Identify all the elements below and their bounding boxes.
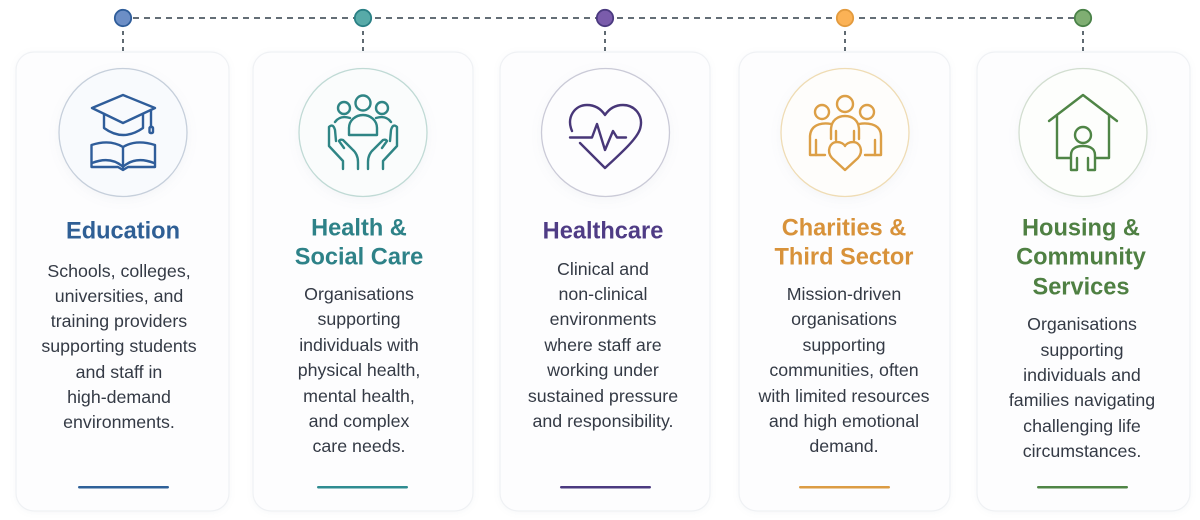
heading: Third Sector [775, 244, 913, 270]
description: environments [550, 309, 656, 329]
card background [253, 52, 473, 511]
description: supporting [802, 335, 886, 355]
description: and staff in [76, 362, 162, 382]
description: individuals and [1023, 365, 1141, 385]
icon circle [59, 68, 187, 196]
description: care needs. [313, 436, 405, 456]
description: non-clinical [559, 284, 647, 304]
description: communities, often [769, 360, 919, 380]
description: Mission-driven [787, 284, 901, 304]
description: Organisations [1027, 314, 1137, 334]
accent bar [799, 486, 890, 488]
icon circle [542, 68, 670, 196]
description: Clinical and [557, 259, 649, 279]
heading: Health & [311, 216, 407, 242]
panel: healthcare [500, 52, 710, 511]
description: organisations [791, 309, 897, 329]
icon circle [1019, 68, 1147, 196]
timeline node: healthcare [597, 10, 613, 26]
description: supporting [317, 309, 401, 329]
description: working under [546, 360, 659, 380]
description: circumstances. [1023, 441, 1141, 461]
description: and complex [309, 411, 410, 431]
card background [16, 52, 229, 511]
heading: Healthcare [543, 218, 663, 244]
timeline node: education [115, 10, 131, 26]
panel: housing and community services [977, 52, 1190, 511]
description: universities, and [55, 286, 183, 306]
timeline node: health and social care [355, 10, 371, 26]
description: supporting [1040, 340, 1124, 360]
accent bar [1037, 486, 1128, 488]
description: environments. [63, 412, 175, 432]
description: and high emotional [769, 411, 919, 431]
heading: Housing & [1022, 216, 1140, 242]
card background [739, 52, 950, 511]
heading: Education [66, 218, 180, 244]
panel: education [16, 52, 229, 511]
icon: people in caring hands [329, 96, 397, 169]
card background [500, 52, 710, 511]
description: demand. [809, 436, 879, 456]
description: supporting students [41, 336, 197, 356]
description: physical health, [298, 360, 420, 380]
icon: family with heart [810, 96, 881, 170]
description: families navigating [1009, 390, 1155, 410]
icon circle [299, 68, 427, 196]
description: and responsibility. [532, 411, 674, 431]
description: mental health, [303, 386, 415, 406]
timeline node: housing [1075, 10, 1091, 26]
description: Organisations [304, 284, 414, 304]
timeline connector [123, 18, 1083, 52]
heading: Services [1032, 274, 1130, 300]
description: high-demand [67, 387, 171, 407]
heading: Community [1016, 244, 1146, 270]
card background [977, 52, 1190, 511]
icon: person in house [1049, 95, 1117, 170]
description: with limited resources [758, 386, 930, 406]
panel: health and social care [253, 52, 473, 511]
panel: charities and third sector [739, 52, 950, 511]
accent bar [78, 486, 169, 488]
icon circle [781, 68, 909, 196]
description: challenging life [1023, 416, 1141, 436]
heading: Social Care [295, 244, 423, 270]
description: Schools, colleges, [47, 261, 191, 281]
accent bar [317, 486, 408, 488]
timeline node: charities [837, 10, 853, 26]
accent bar [560, 486, 651, 488]
description: where staff are [543, 335, 662, 355]
icon: graduation cap and book [92, 95, 155, 170]
description: training providers [51, 311, 187, 331]
icon: heart with pulse [570, 105, 641, 168]
heading: Charities & [782, 216, 906, 242]
description: sustained pressure [528, 386, 678, 406]
description: individuals with [299, 335, 419, 355]
